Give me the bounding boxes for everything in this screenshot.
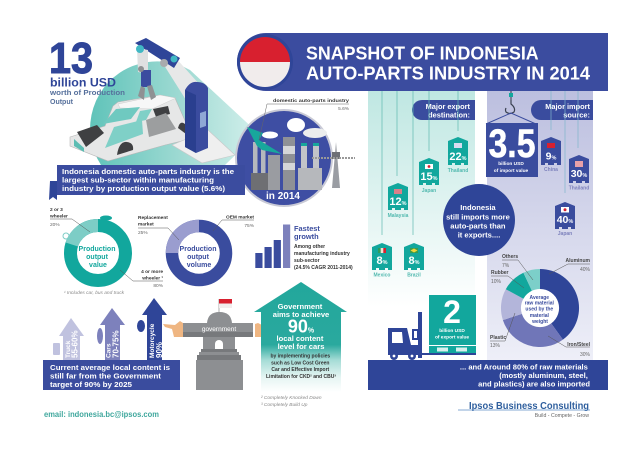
callout: current average local content: target of 90% by 2025: [50, 380, 133, 389]
icon: teal lightning: [247, 127, 282, 154]
label: others: 7%: [502, 263, 510, 269]
tag: Mexico 8%: [372, 91, 392, 278]
icon: car: [100, 216, 112, 220]
title banner: [237, 33, 608, 91]
logo: Ipsos Business Consulting: Build - Compete - Grow: [535, 413, 589, 419]
label: plastic: Plastic: [490, 335, 506, 341]
label: others: [502, 254, 533, 280]
callout: current average local content: Current average local content is: [50, 363, 170, 372]
panel: import background: [487, 91, 593, 361]
tag: Japan 15%: Japan: [422, 188, 436, 194]
label: rubber: [491, 270, 524, 288]
email: email: indonesia.bc@ipsos.com: [44, 410, 159, 419]
callout: government target arrow: Limitation for CKD² and CBU³: [266, 374, 336, 380]
label: domestic auto-parts industry: domestic auto-parts industry: [273, 98, 349, 104]
callout: sub-sector ribbon: largest sub-sector within manufacturing: [62, 176, 214, 184]
label: iron/steel: 30%: [580, 352, 591, 358]
donut chart: production output volume: Production: [180, 246, 216, 253]
label: 2 or 3 wheeler: 20%: [50, 222, 60, 228]
callout: government target arrow: [254, 282, 347, 392]
arrow: truck: 55-60%: [70, 330, 80, 358]
callout circle: still imports more: auto-parts than: [450, 222, 506, 230]
box: 2 billion USD export value: [429, 294, 476, 353]
callout: sub-sector ribbon: [49, 165, 245, 200]
heading: major import source: [531, 100, 593, 120]
label: 4 or more wheeler: 4 or more: [141, 269, 163, 275]
callout: raw materials also imported: (mostly aluminum, steel,: [499, 371, 588, 380]
tag: Malaysia 12%: 12%: [389, 196, 407, 208]
panel: export background: [368, 91, 475, 361]
tag: 3.5 billion USD import value: [486, 91, 538, 177]
text block: fastest growth: Fastest: [294, 224, 320, 233]
label: 4 or more wheeler: 80%: [153, 283, 164, 289]
arrow: truck: Truck: [65, 340, 72, 358]
donut chart: production output value: value: [89, 262, 107, 269]
tag: Thailand 22%: 22%: [449, 151, 467, 163]
text block: fastest growth: (24.5% CAGR 2011-2014): [294, 265, 353, 271]
callout circle: still imports more: still imports more: [446, 212, 510, 222]
tag: Thailand 30%: Thailand: [569, 186, 589, 192]
donut chart: production output volume: [138, 214, 255, 280]
illustration: government building: [163, 299, 270, 390]
label: rubber: Rubber: [491, 270, 509, 276]
label: replacement market: 25%: [138, 230, 148, 236]
text block: fastest growth: Among other: [294, 244, 325, 250]
heading: major export destination: Major export: [426, 102, 471, 111]
donut chart: raw material: weight: [531, 319, 548, 325]
label: domestic auto-parts industry: 5.6%: [338, 106, 350, 112]
callout: current average local content: still far from the Government: [50, 372, 161, 380]
title text: SNAPSHOT OF INDONESIA: [306, 44, 539, 64]
tag: Mexico 8%: Mexico: [374, 272, 390, 278]
label: others: Others: [502, 254, 518, 260]
donut chart: raw material: material: [530, 313, 549, 319]
callout: government target arrow: aims to achieve: [273, 310, 329, 319]
tag: Thailand 22%: Thailand: [448, 168, 468, 174]
callout: government target arrow: 90%: [288, 316, 315, 336]
import panel: [486, 91, 593, 237]
arrow: cars: Cars: [106, 343, 113, 358]
donut chart: raw material: [490, 254, 591, 358]
icon: Indonesian flag: [237, 34, 293, 90]
label: replacement market: [138, 215, 179, 240]
label: 2 or 3 wheeler: [49, 207, 90, 232]
label: OEM market: 75%: [244, 223, 255, 229]
label: aluminum: 40%: [580, 267, 591, 273]
label: rubber: 10%: [491, 279, 502, 285]
segment: plastic 13%: [501, 289, 523, 320]
label: iron/steel: Iron/Steel: [567, 342, 591, 348]
heading: major import source: source:: [563, 110, 590, 120]
callout: raw materials also imported: ... and Around 80% of raw materials: [460, 362, 588, 372]
export panel: [372, 91, 475, 278]
text block: fastest growth: sub-sector: [294, 258, 320, 264]
donut chart: raw material: raw material: [525, 300, 555, 306]
tag: Mexico 8%: 8%: [376, 255, 388, 267]
label: replacement market: Replacement: [138, 215, 168, 221]
illustration: teal circle backdrop: [90, 61, 258, 195]
label: aluminum: Aluminum: [566, 258, 591, 264]
arrow: motorcycle: [142, 298, 167, 361]
segment: rubber 10%: [506, 273, 532, 299]
footnote: includes: ¹ Includes car, bus and truck: [64, 290, 125, 296]
heading: 13 billion USD: billion USD: [50, 78, 116, 90]
tag: China 9%: [541, 91, 561, 173]
tag: Malaysia 12%: [388, 91, 409, 219]
tag: Japan 40%: [555, 91, 575, 237]
icon: scooter: [63, 233, 69, 239]
callout circle: still imports more: Indonesia: [460, 203, 496, 212]
heading: 13 billion USD: 13: [49, 34, 93, 83]
arrow: cars: [100, 308, 125, 361]
label: iron/steel: [548, 336, 591, 358]
label: OEM market: [213, 214, 255, 231]
segment: iron/steel 30%: [503, 314, 563, 347]
label: 4 or more wheeler: [120, 269, 164, 289]
callout: government target arrow: Car and Effective Import: [271, 367, 330, 373]
text block: fastest growth: growth: [294, 232, 319, 241]
tag: Brazil 8%: [404, 91, 424, 278]
tag: China 9%: China: [544, 167, 558, 173]
label: OEM market: OEM market: [226, 214, 254, 220]
icon: left pointing hand: [163, 321, 183, 337]
label: replacement market: market: [138, 222, 154, 228]
callout: government target arrow: level for cars: [278, 342, 324, 351]
callout: current average local content: [43, 360, 180, 390]
heading: 13 billion USD: Output: [50, 99, 74, 106]
heading: major export destination: [412, 100, 475, 120]
text block: fastest growth: manufacturing industry: [294, 251, 350, 257]
tag: 3.5 billion USD import value: 3.5: [488, 122, 536, 166]
box: 2 billion USD export value: billion USD: [439, 328, 465, 334]
tag: Japan 40%: 40%: [557, 214, 573, 226]
callout: raw materials also imported: [368, 360, 608, 390]
icon: factory buildings: [251, 137, 322, 190]
label: aluminum: [549, 258, 591, 274]
tag: China 9%: 9%: [546, 150, 556, 162]
icon: motorcycle: [137, 320, 145, 332]
callout: government target arrow: Government: [278, 302, 323, 311]
caption: in 2014: in 2014: [266, 191, 300, 202]
tag: 3.5 billion USD import value: billion USD: [498, 161, 524, 167]
callout circle: still imports more: it exports....: [458, 230, 500, 240]
heading: major import source: Major import: [545, 102, 591, 111]
illustration: factory circle: [236, 110, 355, 206]
arrow: motorcycle: 90%: [155, 342, 164, 358]
tag: 3.5 billion USD import value: of import value: [494, 168, 529, 174]
tag: Thailand 30%: [569, 91, 589, 192]
heading: 13 billion USD: [49, 34, 125, 106]
arrow: cars: 70-75%: [112, 330, 121, 358]
illustration: robot arm: [135, 38, 235, 163]
heading: 13 billion USD: worth of Production: [49, 90, 125, 97]
logo: Ipsos Business Consulting: [458, 401, 590, 419]
segment: aluminum 40%: [540, 269, 579, 340]
tag: Japan 15%: 15%: [420, 171, 438, 183]
heading: major export destination: destination:: [428, 110, 470, 120]
callout: raw materials also imported: and plastics) are also imported: [478, 380, 590, 388]
donut chart: production output value: output: [86, 254, 109, 261]
tag: Malaysia 12%: Malaysia: [388, 213, 409, 219]
callout: government target arrow: local content: [277, 334, 324, 343]
arrow: motorcycle: Motorcycle: [149, 323, 156, 358]
icon: pylon: [312, 142, 355, 188]
label: 2 or 3 wheeler: 2 or 3: [50, 207, 63, 213]
donut chart: production output value: Production: [79, 246, 116, 253]
callout: sub-sector ribbon: Indonesia domestic auto-parts industry is the: [62, 167, 234, 176]
arrow: truck: [59, 318, 84, 361]
donut chart: raw material: Average: [530, 295, 549, 301]
illustration: car body: [70, 95, 186, 161]
title text: AUTO-PARTS INDUSTRY IN 2014: [306, 64, 590, 84]
label: 2 or 3 wheeler: wheeler: [49, 214, 68, 220]
icon: flag: [219, 299, 232, 313]
donut chart: production output volume: output: [187, 254, 210, 261]
bar chart: fastest growth: [255, 224, 290, 268]
callout: government target arrow: by implementing policies: [270, 354, 330, 360]
tag: Thailand 30%: 30%: [571, 168, 587, 180]
icon: right pointing hand: [255, 323, 270, 337]
tag: Brazil 8%: Brazil: [407, 272, 421, 278]
callout: government target arrow: such as Low Cost Green: [271, 360, 329, 366]
donut chart: production output volume: volume: [187, 262, 211, 269]
label: domestic auto-parts industry: [259, 98, 350, 140]
icon: forklift: [388, 312, 476, 360]
footnotes: CKD and CBU: ² Completely Knocked Down: [261, 395, 322, 401]
label: plastic: 13%: [490, 343, 501, 349]
footnotes: CKD and CBU: ³ Completely Build Up: [261, 402, 308, 408]
donut chart: raw material: used by the: [525, 306, 553, 312]
tag: Brazil 8%: 8%: [408, 255, 420, 267]
illustration: government building: government: [202, 326, 236, 333]
box: 2 billion USD export value: of export value: [435, 334, 469, 340]
illustration: forklift with export value: [388, 294, 476, 360]
tag: Thailand 22%: [448, 91, 468, 174]
tag: Japan 15%: [419, 91, 439, 194]
icon: truck: [53, 343, 60, 355]
label: plastic: [490, 313, 515, 349]
callout: sub-sector ribbon: industry by production output value (5.6%): [62, 184, 225, 193]
logo: Ipsos Business Consulting: Ipsos Business Consulting: [469, 401, 589, 412]
tag: Japan 40%: Japan: [558, 231, 572, 237]
segment: others 7%: [523, 269, 540, 291]
icon: clouds: [262, 118, 327, 138]
donut chart: production output value: [49, 207, 164, 289]
callout circle: still imports more: [443, 184, 515, 256]
box: 2 billion USD export value: 2: [443, 294, 461, 330]
text block: fastest growth: [294, 224, 353, 271]
label: 4 or more wheeler: wheeler ¹: [141, 276, 163, 282]
icon: car wheel: [97, 328, 103, 344]
